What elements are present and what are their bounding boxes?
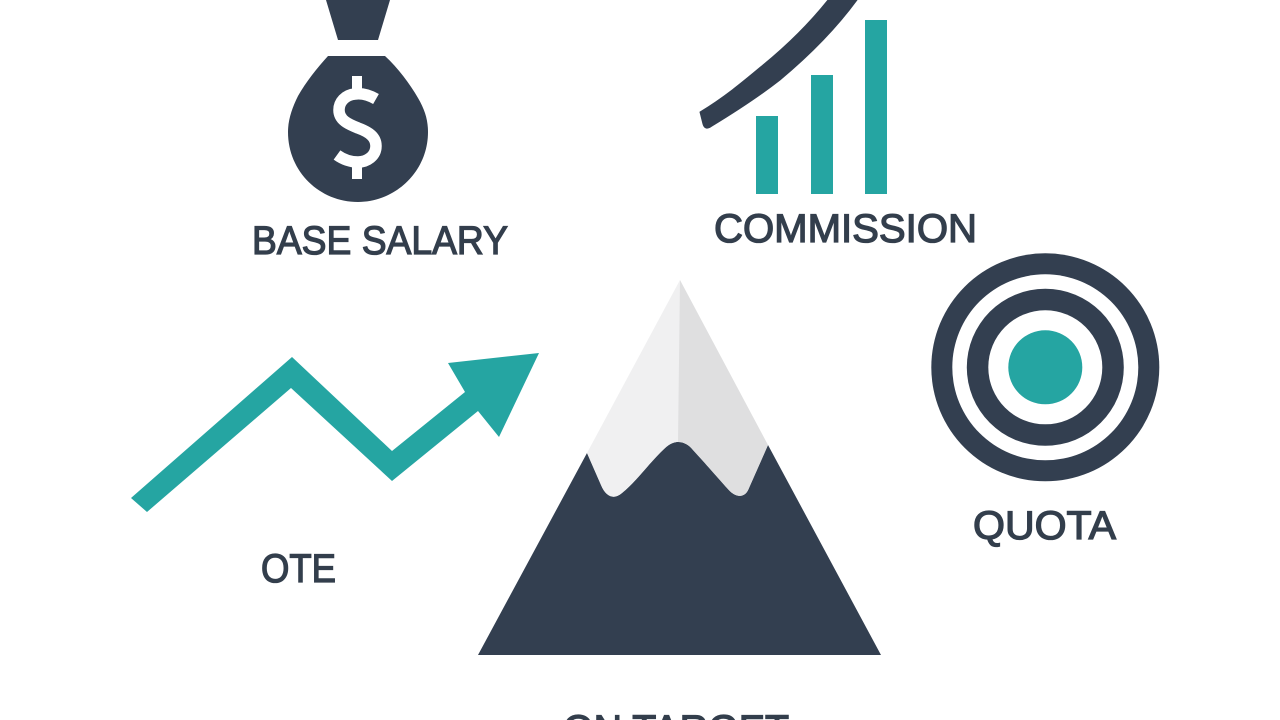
icon: OTE rising zigzag arrow [131, 353, 539, 512]
icon: commission bar chart with rising curve [700, 0, 887, 194]
icon: money bag [288, 0, 428, 202]
label: commission: COMMISSION [714, 207, 977, 251]
label: quota: QUOTA [973, 504, 1116, 548]
label: OTE: OTE [261, 547, 336, 591]
icon: mountain [478, 280, 881, 655]
label: base salary: BASE SALARY [252, 219, 508, 263]
icon: quota target [931, 253, 1159, 481]
